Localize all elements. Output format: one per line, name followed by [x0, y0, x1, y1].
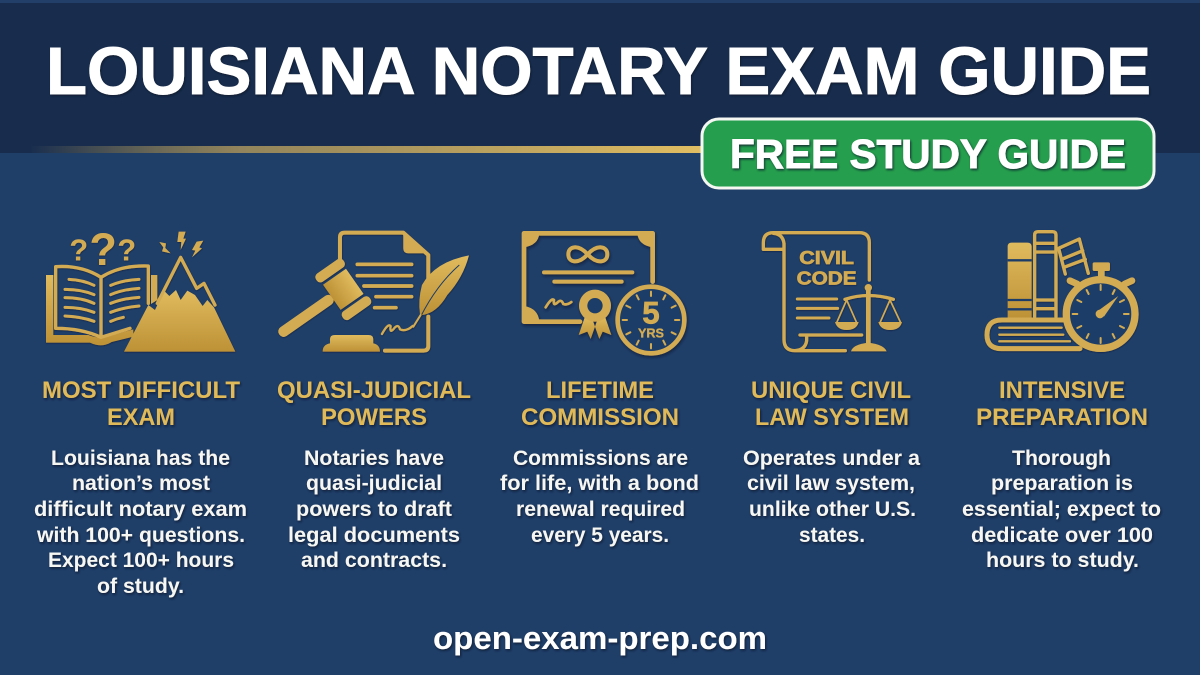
body text: powers to draft: [296, 497, 452, 521]
heading: POWERS: [321, 404, 427, 431]
body text: difficult notary exam: [34, 497, 247, 521]
badge: free study guide: FREE STUDY GUIDE: [730, 131, 1126, 177]
icon: civil code scroll and scales: [763, 233, 902, 351]
column 3: lifetime commission: [500, 377, 699, 547]
icon: open book and mountain: ?: [89, 224, 117, 275]
heading: EXAM: [107, 404, 175, 431]
heading: MOST DIFFICULT: [42, 377, 240, 404]
body text: unlike other U.S.: [749, 497, 916, 521]
heading: LAW SYSTEM: [755, 404, 909, 431]
heading: LIFETIME: [546, 377, 654, 404]
body text: dedicate over 100: [971, 523, 1153, 547]
icon: certificate with five-year clock: 5: [642, 295, 660, 330]
column 1: most difficult exam: [34, 377, 247, 598]
icon: certificate with five-year clock: YRS: [638, 326, 664, 340]
body text: Operates under a: [743, 446, 921, 470]
icon: open book and mountain: ?: [117, 234, 136, 268]
column 2: quasi-judicial powers: [277, 377, 471, 572]
body text: preparation is: [991, 471, 1133, 495]
icon: open book and mountain: [46, 224, 235, 352]
heading: COMMISSION: [521, 404, 679, 431]
body text: civil law system,: [747, 471, 915, 495]
column 5: intensive preparation: [962, 377, 1161, 572]
body text: [34, 446, 247, 598]
body text: hours to study.: [986, 548, 1139, 572]
body text: Louisiana has the: [51, 446, 230, 470]
heading: [42, 377, 240, 431]
heading: [976, 377, 1148, 431]
body text: for life, with a bond: [500, 471, 699, 495]
body text: of study.: [97, 574, 184, 598]
body text: [743, 446, 921, 547]
body text: essential; expect to: [962, 497, 1161, 521]
body text: nation’s most: [72, 471, 210, 495]
icon: open book and mountain: ?: [69, 234, 88, 268]
body text: with 100+ questions.: [36, 523, 245, 547]
icon: civil code scroll and scales: CODE: [797, 268, 857, 289]
icon: certificate with five-year clock: [524, 233, 684, 353]
icon: gavel, document and quill: [263, 233, 469, 357]
body text: [288, 446, 460, 572]
body text: and contracts.: [301, 548, 447, 572]
body text: legal documents: [288, 523, 460, 547]
body text: Notaries have: [304, 446, 444, 470]
body text: Commissions are: [513, 446, 688, 470]
title: LOUISIANA NOTARY EXAM GUIDE: [46, 34, 1151, 109]
body text: [962, 446, 1161, 572]
body text: every 5 years.: [531, 523, 669, 547]
icon: civil code scroll and scales: CIVIL: [799, 247, 854, 268]
body text: states.: [799, 523, 865, 547]
heading: PREPARATION: [976, 404, 1148, 431]
body text: Thorough: [1012, 446, 1111, 470]
header band: [0, 0, 1200, 153]
heading: QUASI-JUDICIAL: [277, 377, 471, 404]
body text: quasi-judicial: [306, 471, 442, 495]
gold divider line: [30, 146, 710, 153]
heading: [277, 377, 471, 431]
heading: [521, 377, 679, 431]
column 4: unique civil law system: [743, 377, 921, 547]
heading: UNIQUE CIVIL: [751, 377, 911, 404]
body text: Expect 100+ hours: [48, 548, 234, 572]
body text: [500, 446, 699, 547]
body text: renewal required: [516, 497, 685, 521]
heading: INTENSIVE: [999, 377, 1125, 404]
icon: books and stopwatch: [987, 232, 1135, 349]
heading: [751, 377, 911, 431]
badge: free study guide: [702, 119, 1154, 188]
footer website: open-exam-prep.com: [433, 620, 767, 656]
